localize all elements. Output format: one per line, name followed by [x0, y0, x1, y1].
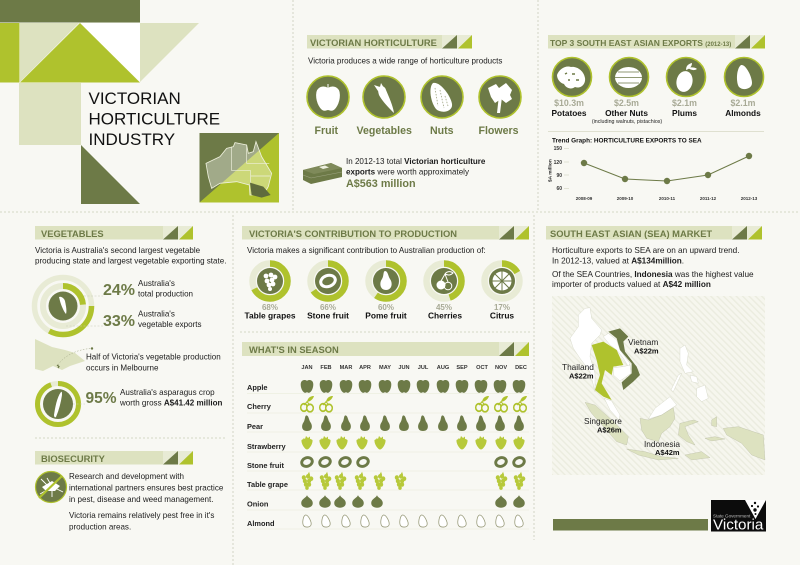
month labels — [301, 365, 527, 371]
month labels: JUN — [398, 365, 410, 371]
footer bar — [553, 519, 708, 530]
line chart: exports to SEA: 2011-12 — [700, 196, 717, 201]
heading: top 3 exports — [548, 35, 765, 48]
export value text: exports were worth approximately — [346, 168, 469, 176]
heading: contribution: VICTORIA'S CONTRIBUTION TO PRODUCTION — [249, 229, 457, 239]
map: South East Asia: Singapore — [584, 416, 622, 426]
map: Victoria — [35, 339, 93, 371]
icon: nuts — [421, 76, 463, 118]
logo: State Government Victoria: State Government — [713, 514, 751, 518]
donut: pome fruit 60%: Pome fruit — [365, 310, 407, 320]
biosecurity text: in pest, disease and weed management. — [69, 495, 214, 504]
ring chart: 24% and 33% — [34, 278, 103, 334]
item: other nuts — [592, 58, 662, 125]
row: pear: Pear — [247, 422, 263, 431]
line chart: exports to SEA — [548, 138, 758, 201]
market text: importer of products valued at A$42 million — [552, 280, 711, 289]
panel: vegetables — [34, 226, 226, 424]
label: Nuts: Nuts — [430, 125, 454, 137]
item: almonds: Almonds — [725, 108, 761, 118]
item: other nuts: Other Nuts — [605, 108, 648, 118]
title: HORTICULTURE — [88, 110, 220, 128]
intro text: producing state and largest vegetable exporting state. — [35, 256, 226, 266]
donut: stone fruit 66%: 66% — [320, 303, 336, 312]
map: South East Asia: A$26m — [597, 426, 622, 434]
donut: citrus 17% — [484, 264, 520, 320]
donut: citrus 17%: 17% — [494, 303, 510, 312]
biosecurity text: Victoria remains relatively pest free in it's — [69, 511, 214, 520]
heading: SEA market: SOUTH EAST ASIAN (SEA) MARKET — [550, 229, 712, 239]
stat: 24% — [103, 279, 193, 299]
logo: State Government Victoria: Victoria — [713, 516, 764, 534]
heading: contribution — [242, 226, 529, 240]
month labels: MAR — [340, 365, 352, 371]
logo: State Government Victoria — [711, 500, 766, 534]
stat: 24%: Australia's — [138, 279, 175, 288]
donut: cherries 45%: Cherries — [428, 310, 462, 320]
stat: 95%: Australia's asparagus crop — [120, 388, 215, 397]
item: plums: $2.1m — [672, 98, 697, 108]
market text — [552, 246, 754, 289]
icon: stack of money — [303, 163, 342, 184]
heading: Victorian horticulture: VICTORIAN HORTICULTURE — [310, 38, 437, 48]
label: Vegetables: Vegetables — [356, 125, 412, 137]
donut: cherries 45% — [426, 264, 462, 320]
heading: vegetables — [35, 226, 193, 240]
biosecurity text: international partners ensures best practice — [69, 484, 224, 492]
heading: what's in season — [242, 342, 529, 356]
row: onion — [247, 495, 525, 508]
panel: biosecurity — [35, 451, 224, 532]
row: table grape — [247, 472, 525, 490]
icon: flowers — [479, 76, 521, 118]
label: Fruit: Fruit — [314, 125, 339, 137]
row: onion: Onion — [247, 500, 269, 508]
line chart: exports to SEA: 150 — [554, 146, 562, 152]
heading: biosecurity: BIOSECURITY — [41, 454, 106, 464]
line chart: exports to SEA: 2010-11 — [659, 196, 676, 201]
market text: In 2012-13, valued at A$134million. — [552, 256, 684, 266]
row: strawberry: Strawberry — [247, 442, 287, 451]
row: pear — [247, 415, 524, 431]
biosecurity text — [69, 472, 224, 532]
row: almond — [247, 515, 523, 528]
row: almond: Almond — [247, 519, 275, 528]
month labels: APR — [359, 365, 371, 371]
export value text: A$563 million — [346, 178, 416, 190]
heading: SEA market — [546, 226, 762, 240]
line chart: exports to SEA: 90 — [556, 173, 562, 179]
heading: top 3 exports: TOP 3 SOUTH EAST ASIAN EXPORTS (2012-13) — [550, 38, 731, 48]
icon: vegetables — [363, 76, 405, 118]
item: other nuts: $2.5m — [614, 98, 639, 108]
month labels: JAN — [301, 365, 313, 371]
export value text — [346, 157, 486, 190]
stat: 95%: 95% — [86, 390, 117, 407]
map: South East Asia: Thailand — [562, 362, 594, 372]
line chart: exports to SEA: 2009-10 — [617, 196, 634, 201]
donut: cherries 45%: 45% — [436, 303, 452, 312]
row: cherry — [247, 396, 527, 412]
row: cherry: Cherry — [247, 402, 272, 411]
market text: Of the SEA Countries, Indonesia was the highest value — [552, 270, 754, 279]
divider line — [548, 130, 764, 133]
item: potatoes: Potatoes — [551, 108, 587, 118]
map: South East Asia: A$22m — [634, 346, 659, 356]
month labels: SEP — [456, 365, 468, 371]
stat: 33%: Australia's — [138, 310, 175, 318]
month labels: MAY — [379, 365, 391, 371]
stat: 24%: 24% — [103, 282, 135, 299]
panel: what's in season — [242, 342, 529, 529]
stat: 33%: 33% — [103, 313, 135, 330]
label: Flowers: Flowers — [478, 125, 519, 137]
row: stone fruit: Stone fruit — [247, 461, 284, 470]
month labels: AUG — [437, 365, 449, 371]
panel: Victorian horticulture — [303, 35, 521, 190]
item: potatoes: $10.3m — [554, 98, 584, 108]
donut: stone fruit 66% — [307, 264, 349, 320]
row: strawberry — [247, 436, 525, 451]
panel: top 3 South East Asian exports — [548, 35, 765, 201]
title: VICTORIAN — [88, 89, 181, 108]
item: almonds: $2.1m — [731, 98, 756, 108]
biosecurity text: Research and development with — [69, 472, 184, 481]
ring chart: 95% asparagus — [38, 384, 85, 424]
Melbourne text: Half of Victoria's vegetable production — [86, 352, 221, 362]
export value text: In 2012-13 total Victorian horticulture — [346, 157, 486, 166]
item: potatoes — [551, 58, 592, 118]
line chart: exports to SEA: 2008-09 — [576, 196, 593, 201]
donut: table grapes 68% — [244, 264, 296, 320]
line chart: exports to SEA: 2012-13 — [741, 196, 758, 201]
panel: South East Asian market — [546, 226, 765, 475]
stat: 24%: total production — [138, 290, 193, 298]
month labels: FEB — [320, 365, 332, 371]
donut: pome fruit 60%: 60% — [378, 303, 394, 312]
month labels: DEC — [515, 365, 527, 371]
item: plums: Plums — [672, 108, 697, 118]
icon: Australia map with Victoria highlighted — [200, 133, 279, 202]
heading: Victorian horticulture — [307, 35, 472, 48]
month labels: NOV — [495, 365, 507, 371]
intro text: Victoria is Australia's second largest vegetable — [35, 246, 200, 255]
title: INDUSTRY — [88, 130, 175, 149]
donut: pome fruit 60% — [365, 264, 407, 320]
donut: table grapes 68%: Table grapes — [244, 310, 296, 320]
donut: stone fruit 66%: Stone fruit — [307, 310, 349, 320]
row: stone fruit — [247, 456, 526, 470]
intro text: Victoria produces a wide range of horticulture products — [308, 56, 502, 66]
item: plums — [666, 58, 706, 118]
header geometric graphic — [0, 0, 199, 204]
item: other nuts: (including walnuts, pistachios) — [592, 119, 662, 125]
line chart: exports to SEA: Trend Graph: HORTICULTURE EXPORTS TO SEA — [552, 138, 702, 144]
row separators — [247, 394, 529, 529]
panel: Victoria's contribution to production — [242, 226, 529, 320]
map: South East Asia: A$42m — [655, 448, 680, 457]
stat: 95%: worth gross A$41.42 million — [120, 398, 222, 408]
icon: fruit — [307, 76, 349, 118]
row: apple — [247, 380, 525, 393]
item: almonds — [724, 58, 764, 118]
month labels: OCT — [476, 365, 488, 371]
line chart: exports to SEA: 120 — [554, 160, 562, 166]
heading: biosecurity — [35, 451, 193, 464]
stat: 33%: vegetable exports — [138, 320, 202, 329]
month labels: JUL — [418, 365, 429, 371]
Melbourne text: occurs in Melbourne — [86, 364, 159, 372]
stat: 95% — [86, 388, 223, 408]
icon: pest crossed out — [36, 472, 66, 502]
stat: 33% — [103, 310, 202, 330]
intro text: Victoria makes a significant contribution to Australian production of: — [247, 246, 486, 255]
map: South East Asia — [552, 296, 765, 475]
line chart: exports to SEA: 60 — [556, 186, 562, 192]
map: South East Asia: Indonesia — [644, 439, 680, 449]
map: South East Asia: Vietnam — [628, 337, 658, 347]
donut: table grapes 68%: 68% — [262, 303, 278, 312]
row: table grape: Table grape — [247, 480, 288, 489]
market text: Horticulture exports to SEA are on an upward trend. — [552, 246, 740, 255]
heading: what's in season: WHAT'S IN SEASON — [249, 345, 339, 355]
biosecurity text: production areas. — [69, 522, 131, 532]
map: South East Asia: A$22m — [569, 372, 594, 380]
row: apple: Apple — [247, 383, 268, 392]
heading: vegetables: VEGETABLES — [41, 229, 104, 239]
line chart: exports to SEA: $A million — [548, 159, 554, 182]
donut: citrus 17%: Citrus — [490, 310, 514, 320]
